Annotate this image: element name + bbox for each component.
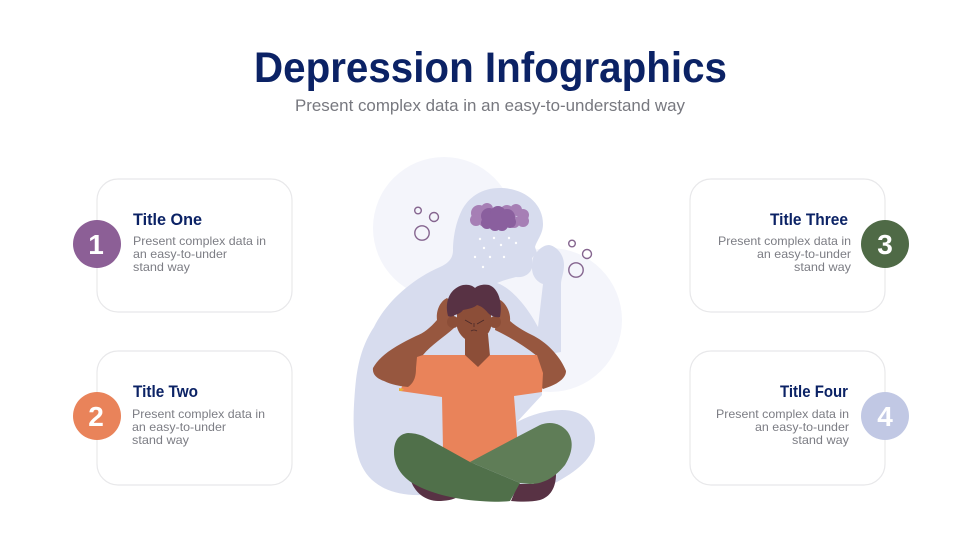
panel: title one: stand way: [133, 260, 190, 274]
illustration: depressed person with shadow: [354, 157, 622, 502]
bubbles: [415, 207, 592, 277]
shadow arm and fist: [532, 245, 564, 356]
shirt: [400, 355, 543, 465]
panel: title two: Present complex data in: [132, 407, 265, 421]
panel: title two: Title Two: [133, 383, 198, 401]
panel: title one: [73, 179, 292, 312]
left arm: [373, 298, 454, 387]
light leg: [470, 423, 572, 484]
ears: [447, 316, 501, 328]
panel: title two: [73, 351, 292, 485]
subtitle: Present complex data in an easy-to-understand way: [295, 96, 685, 115]
dark leg: [394, 433, 520, 502]
panel: title four: an easy-to-under: [755, 420, 849, 434]
panel: title four: Present complex data in: [716, 407, 849, 421]
panel: title three: stand way: [794, 260, 851, 274]
panel: title three: an easy-to-under: [757, 247, 851, 261]
panel: title three: [690, 179, 909, 312]
panel: title three: 3: [877, 229, 893, 260]
panel: title three: Present complex data in: [718, 234, 851, 248]
rain drops: [474, 237, 517, 268]
panel: title four: stand way: [792, 433, 849, 447]
panel: title four: [690, 351, 909, 485]
hair: [447, 285, 501, 317]
panel: title two: stand way: [132, 433, 189, 447]
shirt sleeve accent: [399, 388, 404, 391]
panel: title one: Present complex data in: [133, 234, 266, 248]
facial features: [465, 320, 484, 331]
background circles: [373, 157, 622, 392]
title: Depression Infographics: [254, 44, 727, 92]
panel: title two: an easy-to-under: [132, 420, 226, 434]
panel: title four: 4: [877, 401, 893, 432]
panel: title four: Title Four: [780, 383, 849, 401]
panel: title three: Title Three: [770, 211, 848, 229]
cloud of thoughts: [470, 203, 529, 231]
panel: title one: an easy-to-under: [133, 247, 227, 261]
feet: [410, 474, 556, 502]
shadow silhouette: [354, 188, 595, 497]
panel: title one: 1: [88, 229, 104, 260]
neck: [465, 334, 490, 368]
face: [457, 305, 491, 342]
panel: title two: 2: [88, 401, 104, 432]
right arm: [495, 299, 566, 389]
panel: title one: Title One: [133, 211, 202, 229]
